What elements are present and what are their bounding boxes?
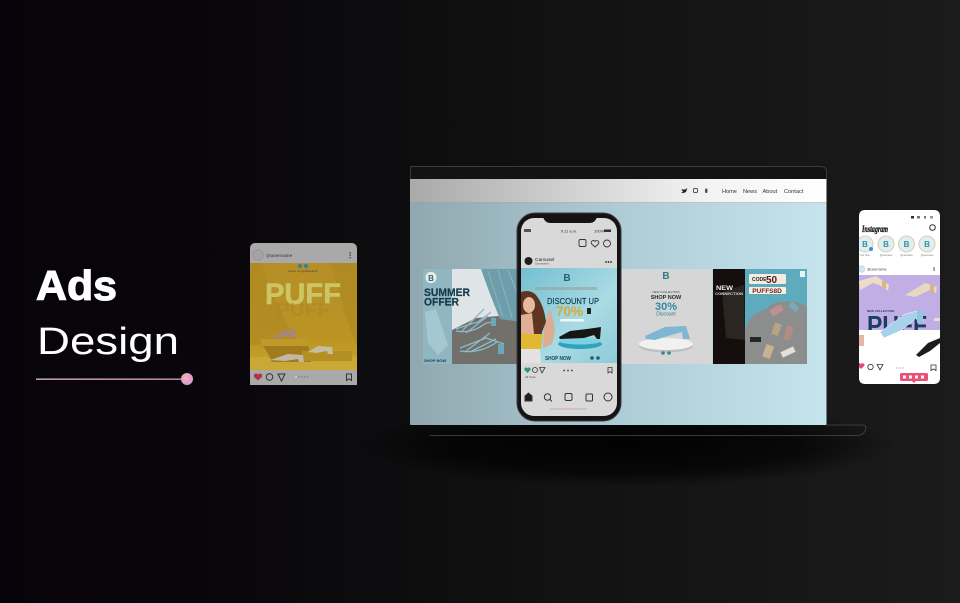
nav links bbox=[722, 189, 804, 195]
story circles bbox=[857, 236, 935, 252]
carousel card: new collection and code 50% bbox=[713, 269, 807, 364]
top action icons bbox=[579, 240, 610, 247]
carousel card: summer offer bbox=[423, 269, 521, 364]
right phone instagram feed: B bbox=[883, 240, 889, 249]
laptop lid frame bbox=[410, 166, 826, 179]
right phone instagram feed: @username bbox=[921, 254, 934, 257]
center phone bbox=[517, 213, 621, 421]
woman portrait bbox=[521, 291, 555, 363]
phone screen bbox=[521, 218, 617, 416]
right phone instagram feed: Your Story bbox=[860, 254, 871, 257]
post header: @username bbox=[266, 253, 293, 258]
post logo: B bbox=[563, 273, 571, 284]
instagram wordmark: Instagram bbox=[861, 225, 888, 235]
carousel card: summer offer: SHOP NOW bbox=[424, 358, 446, 363]
pink notification pill bbox=[900, 373, 928, 381]
black sandal bbox=[559, 327, 601, 339]
carousel card: new collection and code 50%: PUFFS8D bbox=[752, 288, 782, 295]
sandals scattered bbox=[859, 276, 889, 291]
discount post image: SHOP NOW bbox=[545, 356, 571, 362]
account row: Carousel bbox=[535, 257, 554, 263]
carousel card: shop now 30%: NEW COLLECTION bbox=[652, 290, 680, 294]
laptop bbox=[410, 166, 866, 436]
carousel card: shop now 30% bbox=[620, 269, 712, 364]
yellow PUFF image bbox=[250, 263, 357, 370]
home indicator bbox=[550, 408, 587, 410]
discount post image: 70% bbox=[556, 304, 583, 319]
slider dot bbox=[181, 373, 193, 385]
shop tag icon bbox=[800, 271, 805, 277]
right phone instagram feed: B bbox=[904, 240, 910, 249]
shop now text: SHOP NOW bbox=[651, 295, 682, 301]
post account row bbox=[858, 266, 865, 272]
carousel card: summer offer: B bbox=[428, 274, 434, 283]
yellow PUFF image: PUFF bbox=[265, 278, 341, 311]
phone body bbox=[517, 213, 621, 421]
laptop screen background bbox=[410, 179, 826, 425]
laptop base outline bbox=[430, 425, 866, 436]
post header bbox=[253, 250, 351, 260]
carousel card: new collection and code 50%: CONNECTION bbox=[715, 292, 743, 296]
post action row bbox=[524, 367, 612, 379]
right phone instagram feed: @username bbox=[867, 268, 887, 272]
nav links: Contact bbox=[784, 189, 804, 195]
bottom tab bar icons bbox=[525, 393, 612, 402]
carousel card: shop now 30%: Discount bbox=[656, 312, 676, 318]
post image: purple PUFF: PUFF bbox=[867, 310, 927, 340]
yellow PUFF image: PUFF bbox=[276, 300, 330, 320]
nav links: Home bbox=[722, 189, 737, 195]
right phone instagram feed: B bbox=[924, 240, 930, 249]
shoes on sofa bbox=[750, 301, 800, 359]
yellow PUFF image: follow us @officialpuff bbox=[289, 269, 318, 273]
post action row: All Ones bbox=[525, 375, 536, 379]
right phone instagram feed: B bbox=[862, 240, 868, 249]
right phone instagram feed bbox=[857, 210, 940, 384]
discount post image bbox=[521, 268, 617, 363]
account row: Sponsored bbox=[535, 262, 549, 266]
card logo: B bbox=[662, 271, 670, 282]
heading: Design: Design bbox=[37, 321, 179, 363]
carousel card: summer offer: OFFER bbox=[424, 296, 459, 308]
post image: purple PUFF: NEW COLLECTION bbox=[867, 309, 894, 313]
heading: summer offer: SUMMER bbox=[424, 287, 470, 299]
carousel card: new collection and code 50%: CODE bbox=[752, 277, 767, 283]
blue sandal on podium bbox=[639, 326, 693, 352]
right phone instagram feed: @username bbox=[880, 254, 893, 257]
left instagram post card bbox=[250, 243, 357, 385]
nav links: About bbox=[762, 189, 778, 195]
website nav bar bbox=[410, 179, 826, 203]
notch bbox=[543, 217, 597, 223]
status bar: 9:11 a.m. bbox=[561, 228, 577, 234]
podium bbox=[558, 339, 602, 349]
status bar: 100% bbox=[594, 228, 605, 234]
right phone instagram feed: @username bbox=[900, 254, 913, 257]
coupon code boxes bbox=[749, 274, 786, 284]
post action row bbox=[859, 363, 864, 369]
nav links: News bbox=[743, 189, 757, 195]
carousel card: new collection and code 50%: NEW bbox=[716, 285, 734, 292]
heading: Ads: Ads bbox=[36, 262, 117, 309]
post footer icons bbox=[250, 370, 357, 385]
sandal illustration bbox=[456, 309, 504, 354]
post image: purple PUFF bbox=[859, 275, 940, 357]
account row bbox=[524, 257, 612, 266]
status bar bbox=[524, 228, 611, 234]
carousel card: new collection and code 50%: 50 bbox=[766, 275, 778, 286]
divider slider line bbox=[36, 378, 186, 380]
shoe strip bbox=[535, 287, 597, 290]
logo badge bbox=[425, 272, 437, 284]
discount text: DISCOUNT UP bbox=[547, 297, 599, 306]
social icons bbox=[681, 188, 708, 193]
title: Ads Design bbox=[36, 262, 193, 385]
status icons bbox=[911, 216, 933, 218]
discount 30%: 30% bbox=[655, 301, 677, 313]
